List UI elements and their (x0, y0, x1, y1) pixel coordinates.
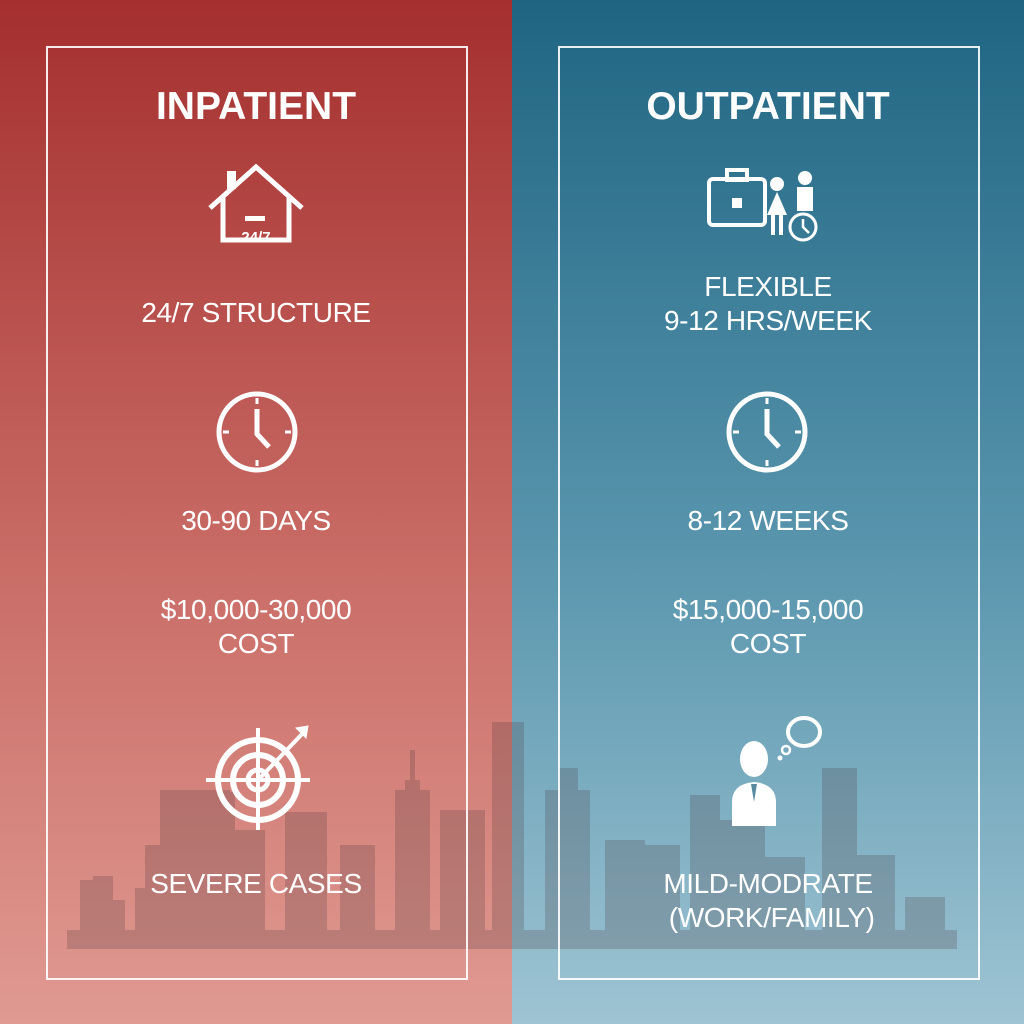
text: outpatient cost (673, 594, 863, 659)
panel: outpatient (558, 46, 980, 980)
text: mild-moderate (663, 868, 875, 933)
text: 8-12 weeks: 8-12 WEEKS (688, 505, 848, 536)
icon: briefcase and family (707, 168, 818, 242)
heading: outpatient: OUTPATIENT (646, 85, 890, 128)
text: flexible hours (664, 271, 872, 336)
panel: inpatient (46, 46, 468, 980)
text: 30-90 days: 30-90 DAYS (181, 505, 331, 536)
text: 24/7 structure: 24/7 STRUCTURE (141, 297, 371, 328)
text: mild-moderate: MILD-MODRATE (663, 868, 873, 899)
text: flexible hours: FLEXIBLE (704, 271, 832, 302)
icon: clock outpatient (726, 392, 808, 472)
icon: person with thought bubble (732, 716, 822, 826)
text: inpatient cost (161, 594, 351, 659)
panel: inpatient background (0, 0, 512, 1024)
icon: target with arrow (206, 725, 310, 830)
text: flexible hours: 9-12 HRS/WEEK (664, 305, 872, 336)
heading: inpatient: INPATIENT (156, 85, 356, 128)
text: inpatient cost: $10,000-30,000 (161, 594, 351, 625)
text: outpatient cost: COST (730, 628, 806, 659)
text: severe cases: SEVERE CASES (150, 868, 362, 899)
text: inpatient cost: COST (218, 628, 294, 659)
icon: house 24/7: 24/7 (241, 229, 271, 246)
icon: house 24/7 (208, 164, 304, 246)
text: outpatient cost: $15,000-15,000 (673, 594, 863, 625)
icon: clock inpatient (216, 392, 298, 472)
text: mild-moderate: (WORK/FAMILY) (669, 902, 875, 933)
panel: outpatient background (512, 0, 1024, 1024)
